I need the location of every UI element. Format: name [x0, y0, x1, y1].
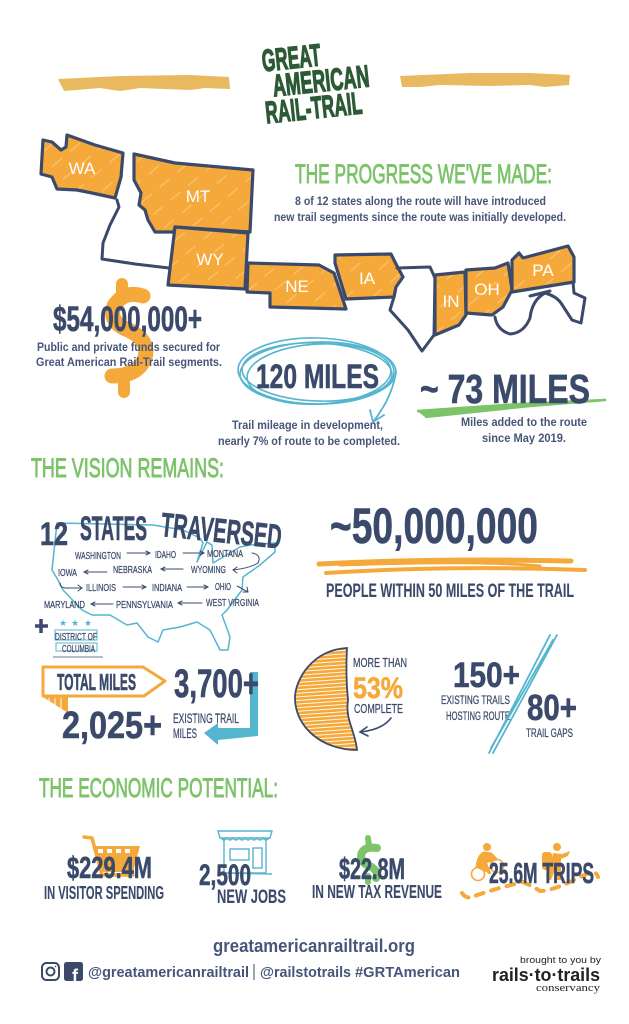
label: existing trail miles: MILES — [173, 726, 197, 741]
label: new jobs: NEW JOBS — [217, 887, 286, 908]
state: Indiana — [435, 272, 466, 335]
label: existing trail miles — [173, 711, 239, 741]
state names list: OHIO — [215, 581, 231, 593]
rails-to-trails conservancy credit: conservancy — [536, 983, 600, 994]
route arrows between states — [60, 551, 259, 606]
icon: storefront — [218, 831, 272, 874]
icon: facebook — [64, 962, 83, 986]
mileage description: nearly 7% of route to be completed. — [218, 436, 400, 448]
state names list: INDIANA — [152, 582, 182, 594]
state names list: ILLINOIS — [86, 582, 116, 594]
stat: 150+: 150+ — [453, 656, 520, 695]
rails-to-trails conservancy credit: brought to you by — [520, 955, 601, 966]
state labels: OH — [474, 280, 500, 299]
logo: Great American Rail-Trail: AMERICAN — [271, 59, 371, 103]
state names list: IDAHO — [155, 549, 176, 561]
state: Pennsylvania — [512, 246, 574, 292]
plus sign — [35, 619, 48, 633]
stat: 80+: 80+ — [527, 687, 577, 728]
label: trail gaps: TRAIL GAPS — [526, 726, 573, 740]
label: more than 53% complete: 53% — [353, 672, 403, 705]
progress description: 8 of 12 states along the route will have introduced — [295, 196, 546, 208]
rails-to-trails conservancy credit — [492, 955, 601, 994]
state names list: IOWA — [58, 567, 77, 579]
heading: 12 states traversed: STATES — [80, 510, 147, 548]
blue slash divider — [489, 635, 557, 753]
dashed trail — [462, 872, 598, 898]
stat: ~50,000,000: ~50,000,000 — [330, 498, 538, 554]
stars: ★ — [71, 618, 79, 628]
state labels: IN — [442, 292, 460, 311]
brush stroke left — [58, 75, 230, 91]
heading: 12 states traversed: 12 — [40, 516, 68, 552]
website url: greatamericanrailtrail.org — [213, 936, 415, 956]
miles added description — [461, 417, 587, 445]
stat: 2,025+: 2,025+ — [62, 705, 162, 747]
label: existing trail miles: EXISTING TRAIL — [173, 711, 239, 726]
social handles: #GRTAmerican — [355, 965, 460, 981]
progress description — [274, 196, 566, 224]
District of Columbia flag: COLUMBIA — [62, 643, 95, 655]
scribbled circle with arrow — [237, 337, 397, 422]
label: in new tax revenue: IN NEW TAX REVENUE — [312, 882, 442, 902]
heading: 12 states traversed — [40, 506, 283, 557]
mileage description: Trail mileage in development, — [232, 420, 383, 432]
icon: cyclist and hiker on dashed trail — [462, 843, 598, 898]
state: Washington — [41, 135, 123, 198]
US outline map — [52, 523, 275, 650]
banner: total miles: TOTAL MILES — [57, 669, 136, 695]
District of Columbia flag: DISTRICT OF — [55, 631, 97, 643]
miles added description: Miles added to the route — [461, 417, 587, 429]
funds description: Public and private funds secured for — [37, 342, 220, 354]
label: existing trails hosting route: EXISTING TRAILS — [441, 695, 510, 707]
state labels: MT — [186, 187, 210, 206]
state: West Virginia and Maryland — [495, 282, 585, 334]
state names list: MARYLAND — [44, 599, 85, 611]
banner: total miles — [43, 667, 165, 713]
cyclist — [472, 843, 504, 880]
state: Iowa — [335, 254, 403, 299]
heading: the vision remains: THE VISION REMAINS: — [31, 453, 224, 483]
state: Nebraska — [247, 263, 346, 309]
stat: 120 miles: 120 MILES — [256, 358, 379, 396]
funds description — [36, 342, 222, 369]
District of Columbia flag — [53, 618, 103, 657]
stars: ★ — [59, 618, 67, 628]
rails-to-trails conservancy credit: rails·to·trails — [492, 964, 600, 985]
social handles — [88, 964, 460, 981]
map of route states — [41, 135, 585, 351]
state: Idaho — [102, 200, 169, 268]
stars: ★ — [84, 618, 92, 628]
hiker — [542, 843, 570, 880]
social handles: @greatamericanrailtrail — [88, 965, 249, 981]
state: Wyoming — [168, 227, 248, 289]
label: more than 53% complete — [353, 655, 407, 716]
state labels: WY — [196, 250, 224, 269]
logo: Great American Rail-Trail: GREAT — [260, 37, 322, 78]
funds description: Great American Rail-Trail segments. — [36, 357, 222, 369]
state: Montana — [134, 154, 253, 232]
stat: 2,500: 2,500 — [199, 859, 251, 892]
chart: 53% complete half circle — [295, 648, 357, 750]
state names list: MONTANA — [207, 548, 243, 560]
label: more than 53% complete: COMPLETE — [354, 701, 403, 716]
state names list: WASHINGTON — [75, 550, 121, 562]
logo: Great American Rail-Trail — [258, 33, 374, 130]
stat: $229.4M: $229.4M — [67, 850, 152, 885]
icon: green dollar sign — [361, 838, 377, 882]
heading: 12 states traversed: TRAVERSED — [159, 506, 283, 557]
icon: shopping cart — [84, 837, 140, 875]
icon: instagram — [42, 963, 59, 980]
mileage description — [218, 420, 400, 448]
orange underline — [319, 560, 585, 573]
state labels: WA — [69, 159, 96, 178]
label: existing trails hosting route: HOSTING ROUTE — [446, 711, 510, 723]
state: Illinois — [390, 267, 435, 351]
state names list: NEBRASKA — [113, 564, 152, 576]
icon: orange dollar sign — [112, 284, 146, 392]
stat: $54,000,000+: $54,000,000+ — [53, 300, 202, 339]
label: in visitor spending: IN VISITOR SPENDING — [44, 883, 164, 903]
social handles: @railstotrails — [260, 965, 351, 981]
icon: facebook: f — [72, 966, 79, 986]
state labels: NE — [285, 277, 309, 296]
state names list: WEST VIRGINIA — [206, 597, 259, 609]
label: more than 53% complete: MORE THAN — [353, 655, 407, 670]
state: Ohio — [466, 263, 512, 315]
state names list — [44, 548, 259, 611]
stat: 3,700+: 3,700+ — [174, 662, 259, 706]
state labels: PA — [532, 261, 554, 280]
state names list: WYOMING — [191, 564, 226, 576]
state labels — [69, 159, 554, 311]
logo: Great American Rail-Trail: RAIL-TRAIL — [264, 85, 364, 130]
state labels: IA — [359, 269, 376, 288]
green underline — [417, 400, 605, 417]
arrow: blue elbow — [204, 672, 258, 745]
arrow: pointing to chart — [360, 718, 391, 736]
brush stroke right — [400, 73, 570, 87]
label: existing trails hosting route — [441, 695, 510, 723]
stars — [59, 618, 92, 628]
progress description: new trail segments since the route was initially developed. — [274, 212, 566, 224]
state names list: PENNSYLVANIA — [116, 599, 173, 611]
stat: $22.8M: $22.8M — [339, 853, 405, 886]
miles added description: since May 2019. — [482, 433, 566, 445]
heading: the economic potential: THE ECONOMIC POTENTIAL: — [39, 773, 278, 803]
